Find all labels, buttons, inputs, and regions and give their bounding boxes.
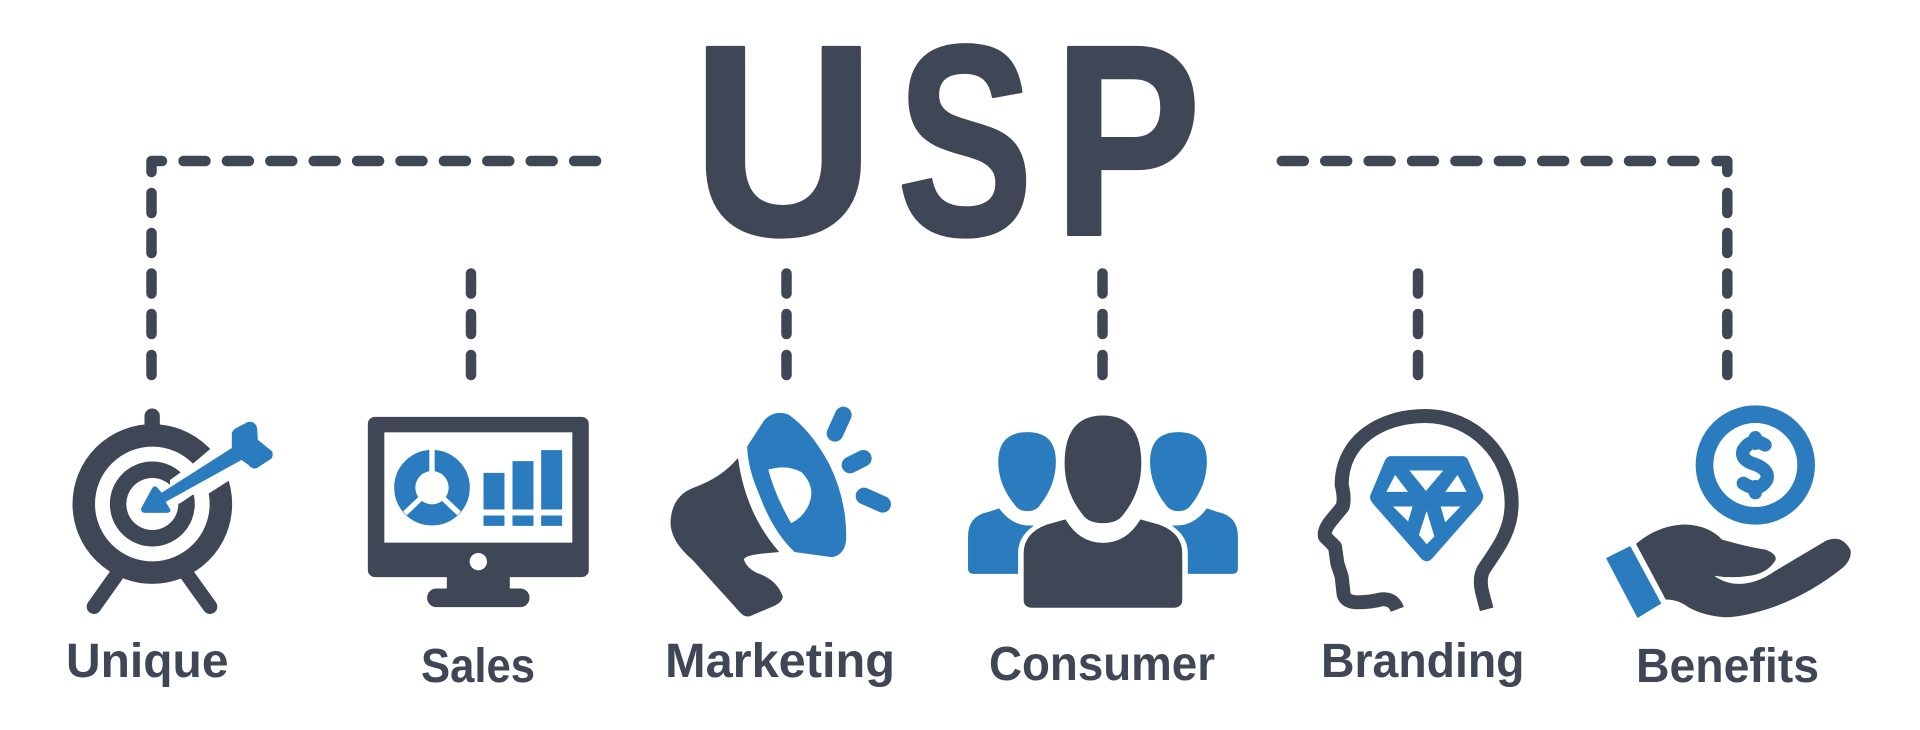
label: Branding: Branding <box>1321 635 1524 688</box>
donut chart <box>395 448 469 525</box>
megaphone body <box>671 459 782 616</box>
megaphone cone <box>748 413 846 557</box>
icon: target with arrow <box>73 409 272 607</box>
target rings <box>73 425 260 583</box>
icon: consumer group <box>969 416 1237 607</box>
side people <box>969 433 1237 573</box>
bar chart <box>484 451 562 525</box>
diamond <box>1371 457 1483 561</box>
arrow <box>142 422 272 512</box>
hand <box>1637 525 1850 617</box>
label: Sales: Sales <box>421 640 535 693</box>
label: Benefits: Benefits <box>1636 640 1819 693</box>
label: Unique: Unique <box>66 635 228 688</box>
target stand and knob <box>94 409 210 607</box>
label: Marketing: Marketing <box>665 635 895 688</box>
connector: Sales <box>466 274 476 375</box>
title <box>692 0 1201 292</box>
connector: Branding <box>1413 274 1423 375</box>
icon: megaphone <box>671 413 883 616</box>
icon: head with diamond <box>1325 416 1512 609</box>
connector: title to Benefits <box>1282 161 1727 375</box>
head outline <box>1325 416 1512 609</box>
icon: hand with coin <box>1607 414 1850 617</box>
label: Consumer: Consumer <box>989 638 1215 691</box>
sound lines <box>835 415 883 504</box>
connector: Consumer <box>1097 274 1108 375</box>
coin <box>1704 414 1806 516</box>
monitor <box>368 417 588 607</box>
centre person <box>1024 416 1182 607</box>
connector: title to Unique <box>152 161 596 375</box>
icon: monitor with charts <box>368 417 588 607</box>
cuff <box>1607 547 1661 617</box>
connector: Marketing <box>781 274 792 375</box>
